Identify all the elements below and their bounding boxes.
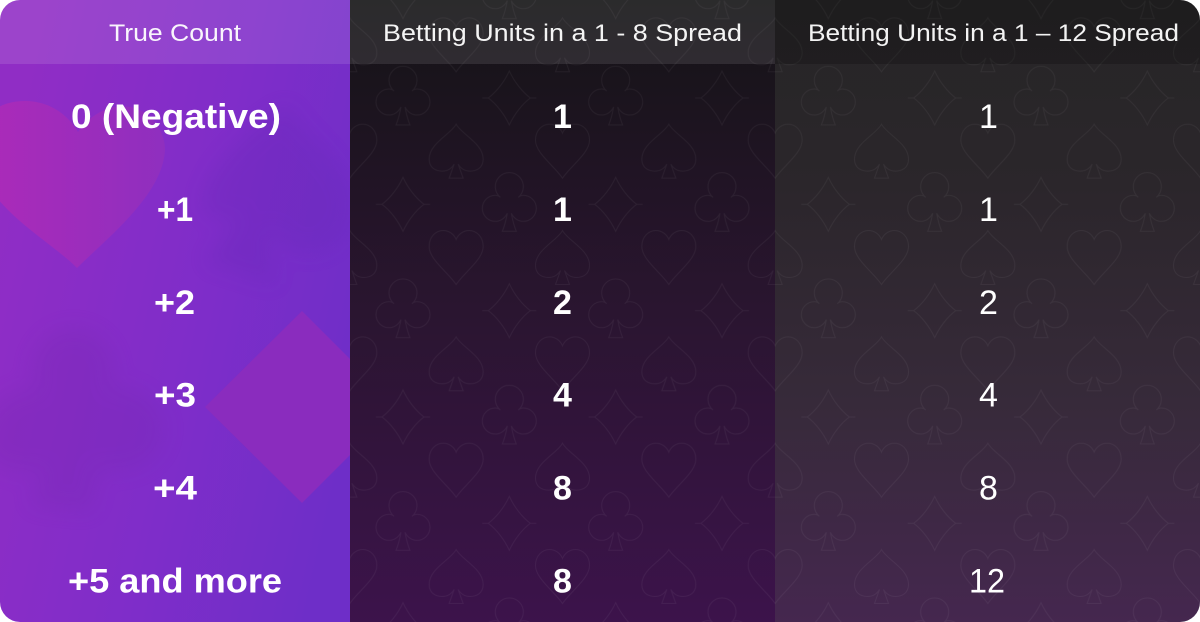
column heading: 1-12 spread: Betting Units in a 1 – 12 Spread <box>808 20 1179 47</box>
true count values: 0 (Negative) <box>71 98 281 136</box>
1-12 spread values: 1 <box>979 98 998 136</box>
true count values: +2 <box>154 284 195 322</box>
true count values: +1 <box>157 191 193 229</box>
1-12 spread values: 1 <box>979 191 998 229</box>
suit outline background pattern <box>350 0 1200 622</box>
true count values: +5 and more <box>68 562 282 600</box>
1-12 spread values: 2 <box>979 284 998 322</box>
panel: 1-8 spread column <box>350 0 775 622</box>
1-8 spread values: 2 <box>553 284 572 322</box>
1-12 spread values: 12 <box>969 562 1005 600</box>
decoration: faint club <box>0 328 165 512</box>
1-12 spread values: 8 <box>979 470 998 508</box>
1-8 spread values: 1 <box>553 191 572 229</box>
1-12 spread values <box>971 104 1004 592</box>
panel: true count column <box>0 0 350 622</box>
1-12 spread values: 4 <box>979 376 998 414</box>
true count values: +4 <box>153 470 197 508</box>
panel: 1-12 spread column <box>775 0 1200 622</box>
1-8 spread values: 8 <box>553 562 572 600</box>
column heading: true count: True Count <box>109 20 241 47</box>
true count values <box>68 98 282 600</box>
1-8 spread values: 8 <box>553 470 572 508</box>
decoration: faint spade <box>202 105 352 285</box>
heading band: 1-8 spread <box>350 0 775 64</box>
decoration: magenta heart <box>0 101 165 268</box>
1-8 spread values: 4 <box>553 376 572 414</box>
heading band: true count <box>0 0 350 64</box>
1-8 spread values <box>553 98 572 600</box>
column heading: 1-8 spread: Betting Units in a 1 - 8 Spread <box>383 20 742 47</box>
heading band: 1-12 spread <box>775 0 1200 64</box>
true count values: +3 <box>154 376 196 414</box>
decoration: purple diamond <box>206 311 350 503</box>
1-8 spread values: 1 <box>553 98 572 136</box>
